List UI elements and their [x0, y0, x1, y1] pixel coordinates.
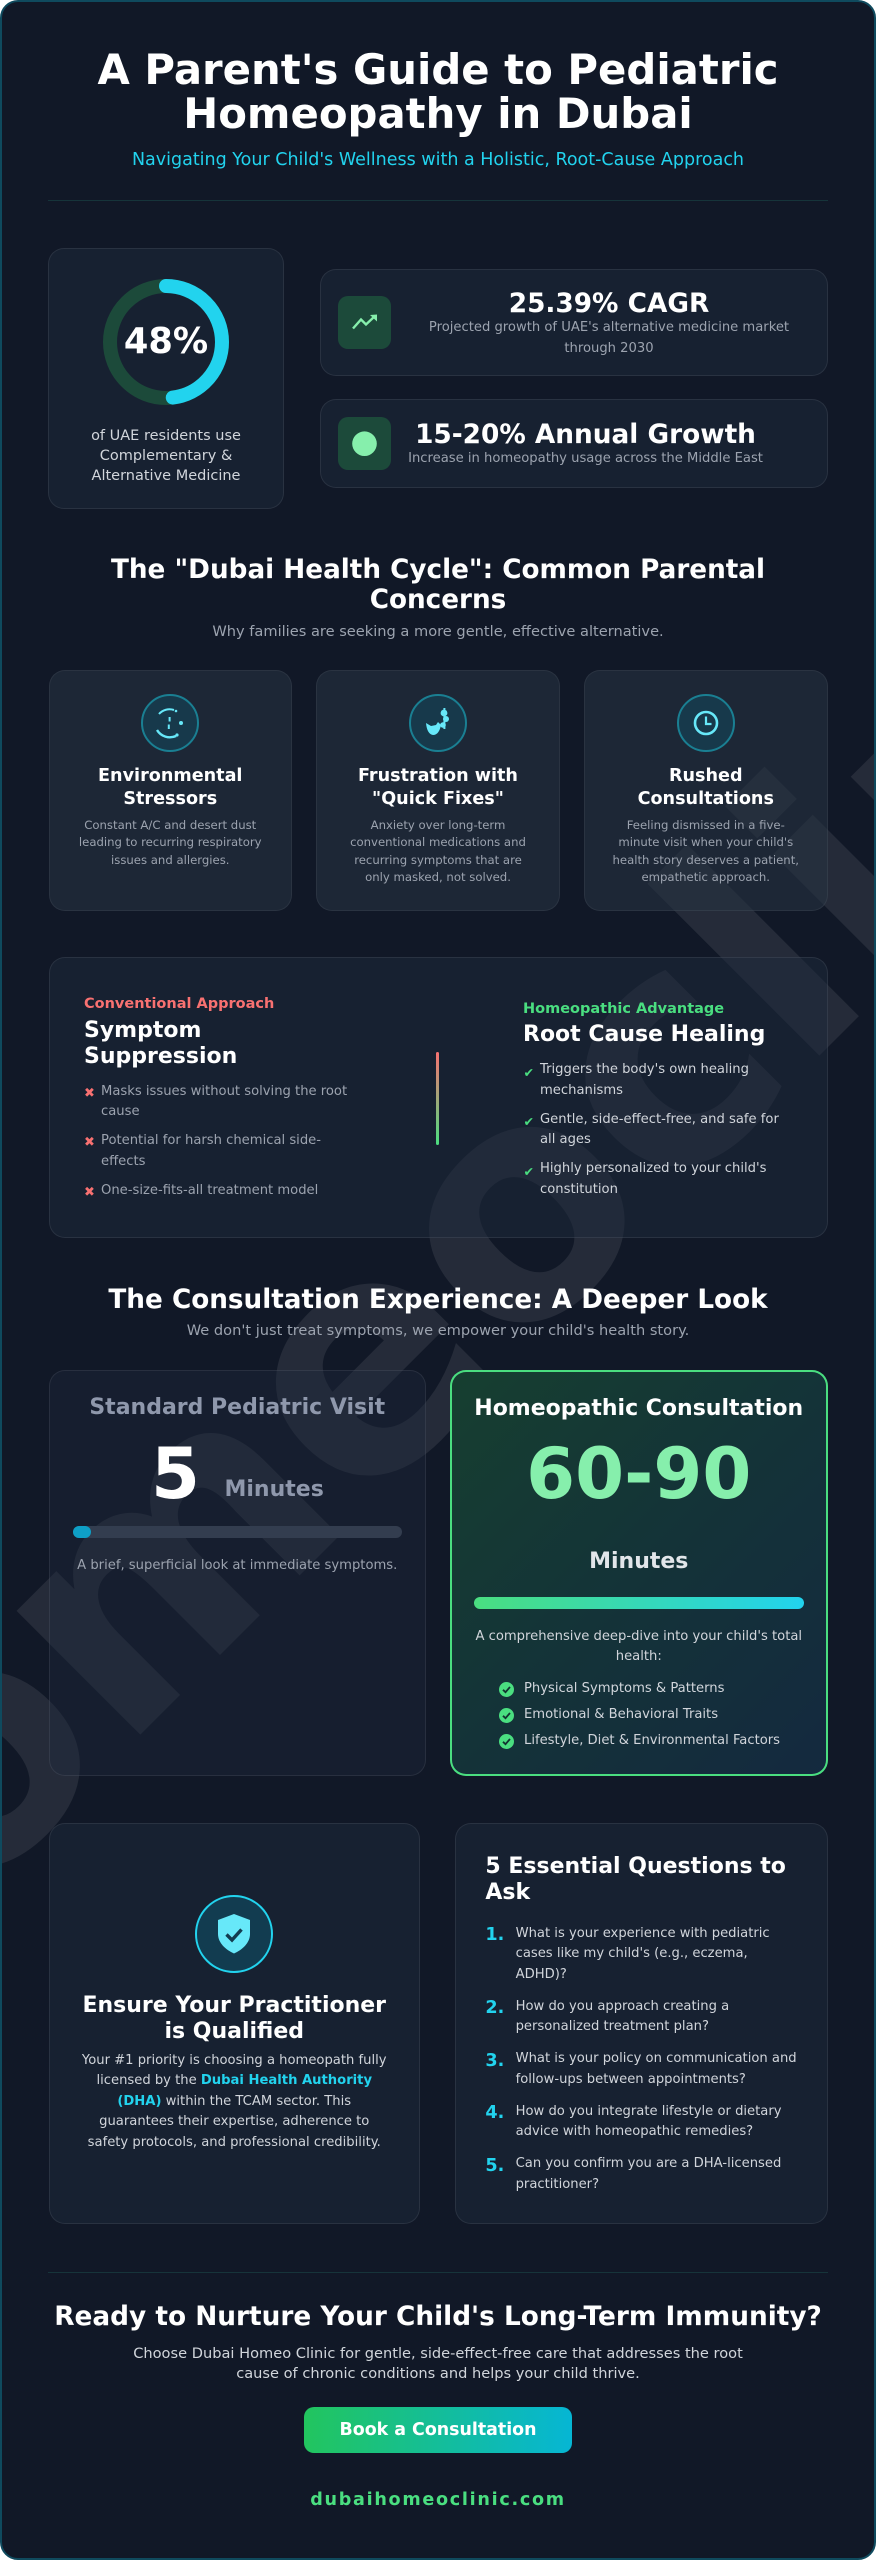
conventional label: Conventional Approach: [84, 996, 274, 1012]
check icon: [499, 1708, 514, 1723]
text: [48, 2344, 828, 2385]
list item: [101, 1084, 347, 1119]
title: Homeopathy in Dubai: [183, 89, 693, 138]
card text: A comprehensive deep-dive into your child's total: [475, 1629, 802, 1644]
card text: only masked, not solved.: [365, 870, 511, 884]
value: 5: 5: [151, 1433, 200, 1515]
list item: Masks issues without solving the root: [101, 1084, 347, 1098]
checklist item: Physical Symptoms & Patterns: [524, 1681, 724, 1696]
list item: all ages: [540, 1132, 591, 1147]
number 1: 1.: [485, 1925, 504, 1945]
icon: pill and dollar: [409, 694, 467, 752]
list item: effects: [101, 1154, 145, 1168]
heading: [111, 555, 765, 615]
card text: safety protocols, and professional credibility.: [88, 2135, 381, 2150]
bar: short duration: [72, 1526, 402, 1538]
card heading: Ensure Your Practitioner: [82, 1992, 386, 2018]
section heading: consultation experience: [108, 1285, 768, 1339]
subtitle: Navigating Your Child's Wellness with a Holistic, Root-Cause Approach: [132, 150, 744, 170]
unit: minutes: Minutes: [224, 1476, 324, 1502]
card title: Frustration with: [358, 766, 518, 786]
card text: Your #1 priority is choosing a homeopath fully: [82, 2053, 387, 2068]
card title: Consultations: [638, 789, 774, 809]
cross icon: ✖: [84, 1185, 95, 1200]
checklist item: Lifestyle, Diet & Environmental Factors: [524, 1733, 780, 1748]
card text: A brief, superficial look at immediate symptoms.: [77, 1558, 397, 1573]
icon: trending up: [338, 296, 391, 349]
panel: homeopathic consultation: [450, 1370, 828, 1776]
donut label: of UAE residents use: [91, 428, 241, 444]
website url: dubaihomeoclinic.com: [310, 2490, 566, 2510]
panel: environmental stressors: [48, 670, 292, 911]
question 4: [516, 2104, 782, 2139]
card text: Constant A/C and desert dust: [84, 818, 256, 832]
header: [97, 45, 779, 170]
card title: [638, 766, 774, 809]
conventional heading: [84, 1018, 237, 1069]
list item: [540, 1112, 779, 1147]
panel: quick fixes: [316, 670, 560, 911]
value: 60-90: 60-90: [526, 1433, 751, 1515]
stat description: [429, 320, 789, 356]
card text: issues and allergies.: [111, 853, 229, 867]
card text: [82, 2053, 387, 2150]
button: [304, 2407, 572, 2453]
number 2: 2.: [485, 1998, 504, 2018]
card heading: Ask: [485, 1880, 530, 1905]
list item: cause: [101, 1104, 140, 1119]
heading: The Consultation Experience: A Deeper Look: [108, 1285, 768, 1315]
list item: Gentle, side-effect-free, and safe for: [540, 1112, 779, 1127]
checklist item: Emotional & Behavioral Traits: [524, 1707, 718, 1722]
list item: Potential for harsh chemical side-: [101, 1133, 321, 1148]
homeopathic heading: Root Cause Healing: [523, 1022, 765, 1047]
list item: Highly personalized to your child's: [540, 1161, 766, 1176]
bar: full duration: [474, 1597, 804, 1609]
list item: constitution: [540, 1182, 618, 1197]
donut value: 48%: [124, 321, 208, 362]
title: [97, 45, 779, 138]
card heading: [485, 1854, 786, 1905]
list item: [101, 1133, 321, 1168]
card text: [612, 818, 799, 884]
question 3: [516, 2051, 797, 2086]
stat description: through 2030: [564, 341, 654, 356]
heading: The "Dubai Health Cycle": Common Parental: [111, 555, 765, 585]
panel: rushed consultations: [584, 670, 828, 911]
text: cause of chronic conditions and helps your child thrive.: [236, 2365, 640, 2382]
card title: [358, 766, 518, 809]
panel: qualified practitioner: [48, 1823, 420, 2224]
number 4: 4.: [485, 2103, 504, 2123]
card heading: Homeopathic Consultation: [474, 1396, 803, 1420]
question 1: ADHD)?: [516, 1967, 567, 1982]
text: Choose Dubai Homeo Clinic for gentle, side-effect-free care that addresses the root: [133, 2345, 743, 2362]
card text: empathetic approach.: [641, 870, 770, 884]
card text: health story deserves a patient,: [612, 853, 799, 867]
question 2: personalized treatment plan?: [516, 2019, 709, 2034]
cross icon: ✖: [84, 1135, 95, 1150]
card text: [79, 818, 262, 867]
card title: Rushed: [669, 766, 743, 786]
conventional heading: Suppression: [84, 1044, 237, 1069]
homeopathic label: Homeopathic Advantage: [523, 1000, 724, 1016]
homeopathic list: [524, 1062, 779, 1197]
card title: "Quick Fixes": [372, 789, 504, 809]
icon: wind cycle: [141, 694, 199, 752]
bar fill: [72, 1526, 90, 1538]
question 1: What is your experience with pediatric: [516, 1926, 770, 1941]
donut label: Alternative Medicine: [92, 468, 240, 484]
question 5: Can you confirm you are a DHA-licensed: [516, 2156, 781, 2171]
question 3: What is your policy on communication and: [516, 2051, 797, 2066]
list item: Triggers the body's own healing: [540, 1062, 749, 1077]
stat description: Increase in homeopathy usage across the Middle East: [408, 451, 763, 466]
card heading: Standard Pediatric Visit: [89, 1395, 385, 1420]
card text: recurring symptoms that are: [354, 853, 522, 867]
check icon: ✔: [524, 1164, 534, 1179]
question 5: [516, 2156, 781, 2192]
card text: Feeling dismissed in a five-: [627, 818, 785, 832]
subheading: Why families are seeking a more gentle, effective alternative.: [212, 623, 664, 640]
cross icon: ✖: [84, 1086, 95, 1100]
title: A Parent's Guide to Pediatric: [97, 45, 779, 94]
card text: [475, 1629, 802, 1664]
check icon: ✔: [524, 1114, 534, 1129]
list item: mechanisms: [540, 1083, 623, 1098]
question 1: cases like my child's (e.g., eczema,: [516, 1946, 748, 1961]
number 3: 3.: [485, 2051, 504, 2071]
heading: Concerns: [370, 585, 506, 615]
question 1: [516, 1926, 770, 1982]
donut label: Complementary &: [100, 448, 232, 464]
panel: standard visit: [48, 1370, 426, 1776]
panel: approach comparison: [48, 957, 828, 1238]
card text: (DHA) within the TCAM sector. This: [117, 2094, 351, 2109]
card title: [98, 766, 242, 809]
card text: health:: [616, 1649, 662, 1664]
icon: dot: [338, 417, 391, 470]
conventional heading: Symptom: [84, 1018, 201, 1042]
question 2: How do you approach creating a: [516, 1999, 729, 2014]
card text: minute visit when your child's: [618, 835, 793, 849]
check icon: [499, 1734, 514, 1749]
list item: [540, 1062, 749, 1098]
check icon: ✔: [524, 1065, 534, 1080]
card text: leading to recurring respiratory: [79, 835, 262, 849]
donut label: [91, 428, 241, 484]
question 5: practitioner?: [516, 2176, 599, 2192]
subheading: We don't just treat symptoms, we empower your child's health story.: [187, 1322, 689, 1339]
question 2: [516, 1999, 729, 2034]
section heading: health cycle: [111, 555, 765, 640]
card heading: [82, 1992, 386, 2044]
icon: clock: [677, 694, 735, 752]
list item: [540, 1161, 766, 1197]
question 4: advice with homeopathic remedies?: [516, 2124, 753, 2139]
button: Book a Consultation: [340, 2420, 536, 2440]
panel: CAGR stat: [320, 269, 828, 376]
donut chart: 48%: [103, 279, 229, 405]
card text: Anxiety over long-term: [371, 818, 505, 832]
number 5: 5.: [485, 2156, 504, 2176]
list item: One-size-fits-all treatment model: [101, 1183, 318, 1198]
checklist: [499, 1681, 780, 1749]
card text: conventional medications and: [350, 835, 526, 849]
card text: [350, 818, 526, 884]
card heading: 5 Essential Questions to: [485, 1854, 786, 1879]
card text: guarantees their expertise, adherence to: [99, 2114, 369, 2129]
card title: Stressors: [123, 789, 217, 809]
check icon: [499, 1682, 514, 1697]
stat value: 15-20% Annual Growth: [415, 420, 756, 450]
center divider: [436, 1052, 439, 1145]
question 4: How do you integrate lifestyle or dietary: [516, 2104, 782, 2119]
call to action text: [54, 2302, 822, 2382]
unit: minutes: Minutes: [589, 1549, 688, 1574]
panel: five questions: [455, 1823, 828, 2224]
card title: Environmental: [98, 766, 242, 786]
icon: shield check: [195, 1895, 273, 1973]
stat value: 25.39% CAGR: [509, 288, 709, 318]
question 3: follow-ups between appointments?: [516, 2072, 746, 2086]
conventional list: [84, 1084, 347, 1200]
stat description: Projected growth of UAE's alternative medicine market: [429, 320, 789, 335]
card heading: is Qualified: [164, 2019, 304, 2044]
panel: annual growth stat: [320, 399, 828, 488]
panel: 48% stat: [48, 248, 284, 509]
heading: Ready to Nurture Your Child's Long-Term Immunity?: [54, 2302, 822, 2332]
card text: licensed by the Dubai Health Authority: [96, 2073, 372, 2088]
